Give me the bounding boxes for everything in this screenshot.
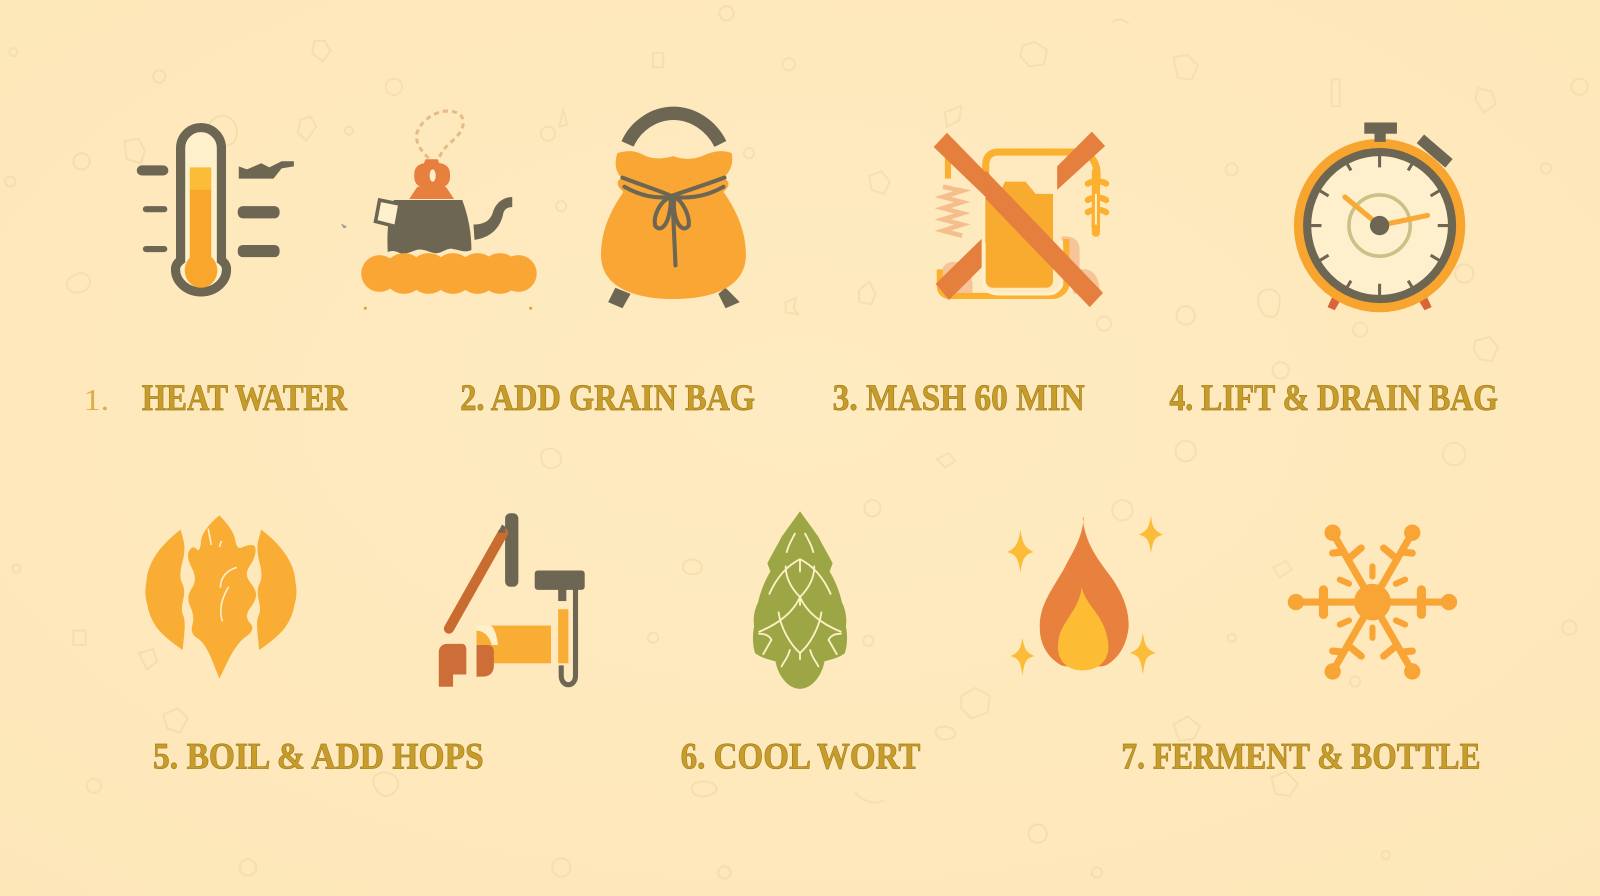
icon: brewing tools (439, 513, 585, 687)
step 4 label: 4. LIFT & DRAIN BAG (1169, 377, 1498, 418)
icon: grain bag (601, 113, 746, 308)
icon: mash tun crossed out (934, 132, 1106, 307)
icon: boiling grain lobes (145, 515, 296, 679)
step 7 label: 7. FERMENT & BOTTLE (1121, 735, 1481, 776)
step 1 label (84, 377, 347, 418)
icon: hop cone (753, 511, 847, 689)
icon: thermometer (137, 128, 294, 292)
step 3 label: 3. MASH 60 MIN (833, 377, 1085, 418)
step 1 label: 1. (84, 383, 109, 417)
step 1 label: HEAT WATER (142, 377, 347, 418)
icon: snowflake (1288, 525, 1457, 680)
icon: kettle on burner (341, 111, 537, 310)
step 5 label: 5. BOIL & ADD HOPS (153, 735, 484, 776)
icon: stopwatch (1294, 122, 1465, 312)
step 6 label: 6. COOL WORT (681, 735, 920, 776)
step 2 label: 2. ADD GRAIN BAG (460, 377, 755, 418)
icon: flame with sparkles (1007, 515, 1163, 676)
